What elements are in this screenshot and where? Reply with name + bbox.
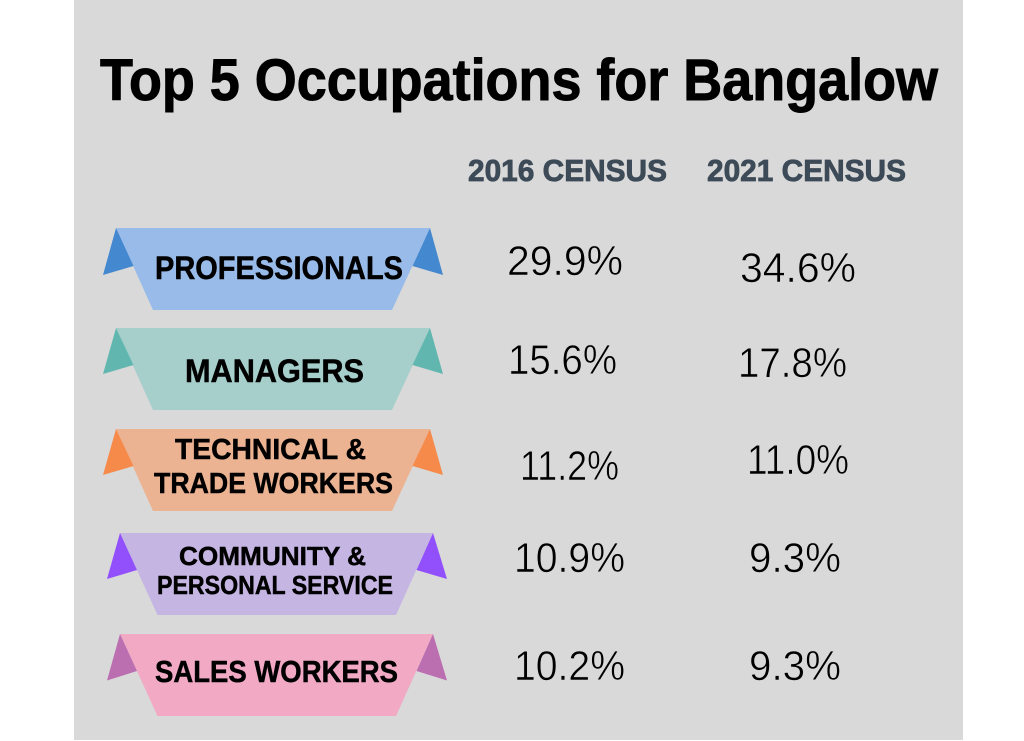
banner: community and personal service <box>107 533 447 615</box>
row: community and personal service <box>107 533 841 615</box>
value: community 2016: 10.9% <box>514 534 625 581</box>
label: technical and trade workers: TECHNICAL & <box>175 434 366 466</box>
value: community 2021: 9.3% <box>749 534 841 581</box>
title: Top 5 Occupations for Bangalow <box>100 48 939 113</box>
column heading: 2021 census: 2021 CENSUS <box>707 153 906 188</box>
value: managers 2021: 17.8% <box>738 339 847 386</box>
column heading: 2016 census: 2016 CENSUS <box>468 153 667 188</box>
row: sales workers <box>107 634 841 716</box>
label: professionals: PROFESSIONALS <box>155 250 403 286</box>
label: community and personal service: PERSONAL SERVICE <box>157 570 393 600</box>
banner: professionals <box>103 228 443 310</box>
value: sales 2016: 10.2% <box>514 642 625 689</box>
row: professionals <box>103 228 856 310</box>
value: technical 2016: 11.2% <box>520 442 619 489</box>
value: sales 2021: 9.3% <box>749 642 841 689</box>
value: professionals 2021: 34.6% <box>740 244 856 291</box>
banner: sales workers <box>107 634 447 716</box>
label: community and personal service <box>157 541 393 600</box>
row: technical and trade workers <box>103 429 849 511</box>
value: managers 2016: 15.6% <box>508 336 617 383</box>
value: professionals 2016: 29.9% <box>507 237 623 284</box>
label: managers: MANAGERS <box>185 353 364 389</box>
label: technical and trade workers: TRADE WORKERS <box>154 468 393 500</box>
label: technical and trade workers <box>154 434 393 500</box>
label: sales workers: SALES WORKERS <box>155 654 398 689</box>
value: technical 2021: 11.0% <box>747 436 849 483</box>
label: community and personal service: COMMUNITY & <box>179 541 366 571</box>
banner: technical and trade workers <box>103 429 443 511</box>
row: managers <box>103 328 847 410</box>
banner: managers <box>103 328 443 410</box>
